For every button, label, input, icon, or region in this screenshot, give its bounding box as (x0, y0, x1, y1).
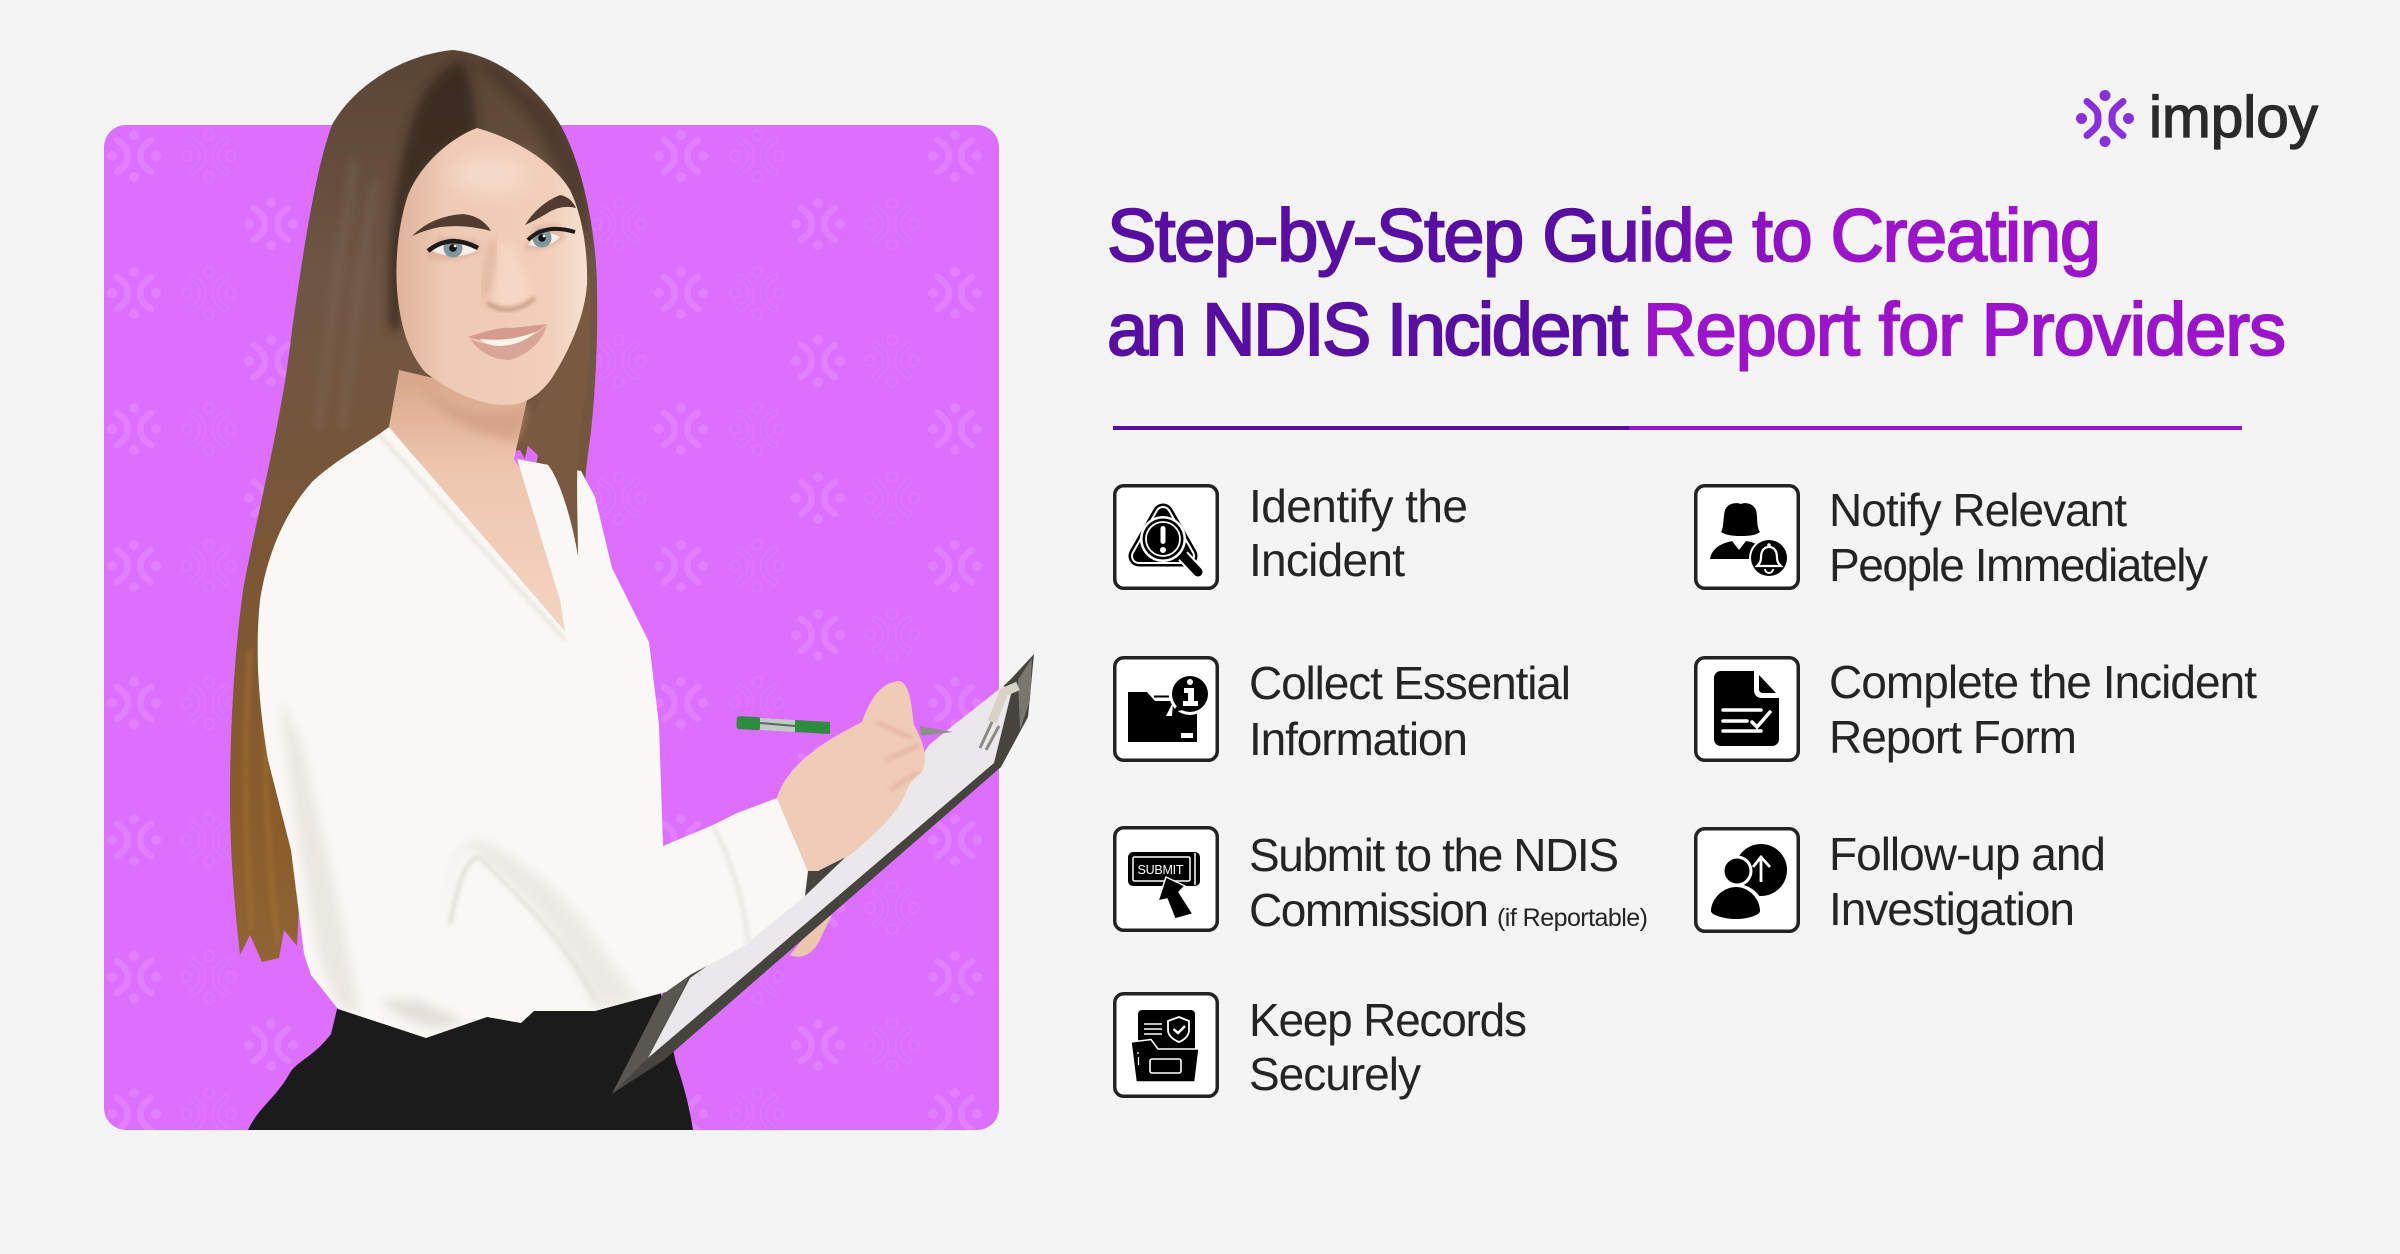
logo wordmark: imploy (2149, 85, 2318, 150)
step text line 2: Commission (1249, 884, 1489, 936)
neck and chest (389, 370, 575, 631)
icon: submit button (1115, 828, 1217, 930)
eye: left (425, 236, 482, 260)
hair strand in front of collar (524, 270, 591, 556)
blouse (258, 427, 808, 1038)
eyebrow: right (525, 195, 576, 225)
eyebrow: left (412, 214, 491, 236)
nose (484, 240, 535, 309)
clipboard (612, 654, 1034, 1094)
step: Submit to the NDIS Commission (1115, 828, 1648, 936)
eye: right (524, 224, 575, 250)
note: if reportable: (if Reportable) (1497, 904, 1648, 932)
face (396, 128, 587, 405)
icon: person with up arrow (1696, 829, 1798, 931)
step text: Keep Records (1249, 994, 1527, 1046)
step text: Identify the (1249, 480, 1468, 532)
step text: Submit to the NDIS (1249, 829, 1619, 881)
logo mark (2076, 90, 2134, 147)
icon: form document (1696, 658, 1798, 760)
step text line 2: Securely (1249, 1048, 1421, 1100)
step: Complete the Incident Report Form (1696, 656, 2257, 763)
step text line 2: Information (1249, 713, 1468, 765)
logo: imploy (2076, 85, 2318, 150)
hand (777, 681, 925, 871)
hand shading (876, 722, 920, 790)
step text: Notify Relevant (1829, 484, 2127, 536)
step: Collect Essential Information (1115, 657, 1571, 765)
skirt (248, 985, 693, 1130)
step: Keep Records Securely (1115, 994, 1527, 1100)
step: Notify Relevant People Immediately (1696, 484, 2208, 591)
step: Follow-up and Investigation (1696, 828, 2106, 935)
step text line 2: Incident (1249, 534, 1405, 586)
panel gap between neck and hair (524, 440, 541, 470)
pen (736, 716, 953, 736)
panel: purple photo backdrop with logo pattern (104, 125, 999, 1140)
step text: Follow-up and (1829, 828, 2106, 880)
step text line 2: People Immediately (1829, 539, 2208, 591)
step text: Collect Essential (1249, 657, 1571, 709)
mouth (468, 324, 547, 360)
icon: person with bell (1696, 486, 1798, 588)
step: Identify the Incident (1115, 480, 1468, 588)
icon: warning magnifier (1115, 486, 1217, 588)
icon: secure records folder (1115, 994, 1217, 1096)
title line 2 end: Report for Providers (1643, 288, 2286, 371)
infographic canvas (104, 50, 2319, 1130)
title line 2 start: an NDIS Incident (1107, 288, 1628, 371)
title divider (1113, 426, 2242, 430)
hair (230, 50, 597, 962)
title (1107, 194, 2286, 371)
forehead highlight (450, 155, 530, 195)
step text: Complete the Incident (1829, 656, 2257, 708)
back fingers under clipboard (790, 915, 832, 957)
step text line 2: Report Form (1829, 711, 2077, 763)
illustration: woman writing on clipboard (230, 50, 1034, 1130)
step text line 2: Investigation (1829, 883, 2075, 935)
icon: submit button: SUBMIT (1138, 863, 1184, 877)
neck shadow (420, 385, 528, 440)
icon: info folder (1115, 658, 1217, 760)
title line 1: Step-by-Step Guide to Creating (1107, 194, 2101, 277)
clip (980, 686, 1018, 750)
